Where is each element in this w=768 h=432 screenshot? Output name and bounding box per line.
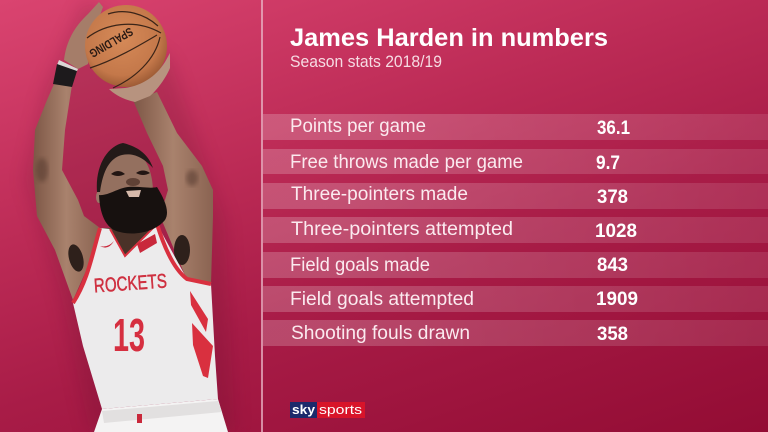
shorts [94,399,228,432]
left arm [33,84,100,300]
left elbow shading [36,158,48,182]
jersey wordmark: ROCKETS [93,270,168,297]
stat labels: Field goals made [290,255,430,276]
stat values: 9.7 [596,153,620,174]
right hand [109,53,170,102]
stat values: 378 [597,187,628,208]
stat values: 843 [597,255,628,276]
sky sports logo: sports [319,402,363,417]
stat values: 36.1 [597,118,630,139]
stat labels: Three-pointers attempted [291,219,513,240]
torso skin [95,228,187,290]
nose [126,178,140,186]
stat labels: Shooting fouls drawn [291,323,470,344]
stat values: 1028 [595,221,637,242]
stat labels: Free throws made per game [290,152,523,173]
hair [97,143,153,192]
stat bars [263,114,768,346]
left hand [64,2,103,69]
player shadow [25,0,235,432]
left armpit [66,243,86,273]
basketball: SPALDING [87,24,136,61]
stat labels [290,116,523,344]
face [100,149,153,200]
stat labels: Three-pointers made [291,184,468,205]
divider [261,0,263,432]
jersey badge [137,234,157,253]
sky sports logo [290,402,365,418]
beard [99,187,167,234]
ear [96,191,102,203]
stat values [595,118,638,345]
subtitle: Season stats 2018/19 [290,52,442,71]
sky sports logo: sky [292,402,316,417]
right arm [133,92,213,284]
eyes [111,170,150,176]
jersey [73,224,218,409]
neck [110,222,155,254]
stat values: 358 [597,324,628,345]
wrist tape [57,60,78,73]
wristband [53,64,77,87]
stat values: 1909 [596,289,638,310]
title: James Harden in numbers [290,24,608,52]
basketball [85,5,167,88]
stat labels: Field goals attempted [290,289,474,310]
right armpit [174,235,190,265]
mouth [126,190,141,197]
jersey number: 13 [113,309,145,361]
jersey swoosh [100,241,114,248]
stat labels: Points per game [290,116,426,137]
player: James Harden [33,2,228,432]
right elbow shading [186,170,198,186]
